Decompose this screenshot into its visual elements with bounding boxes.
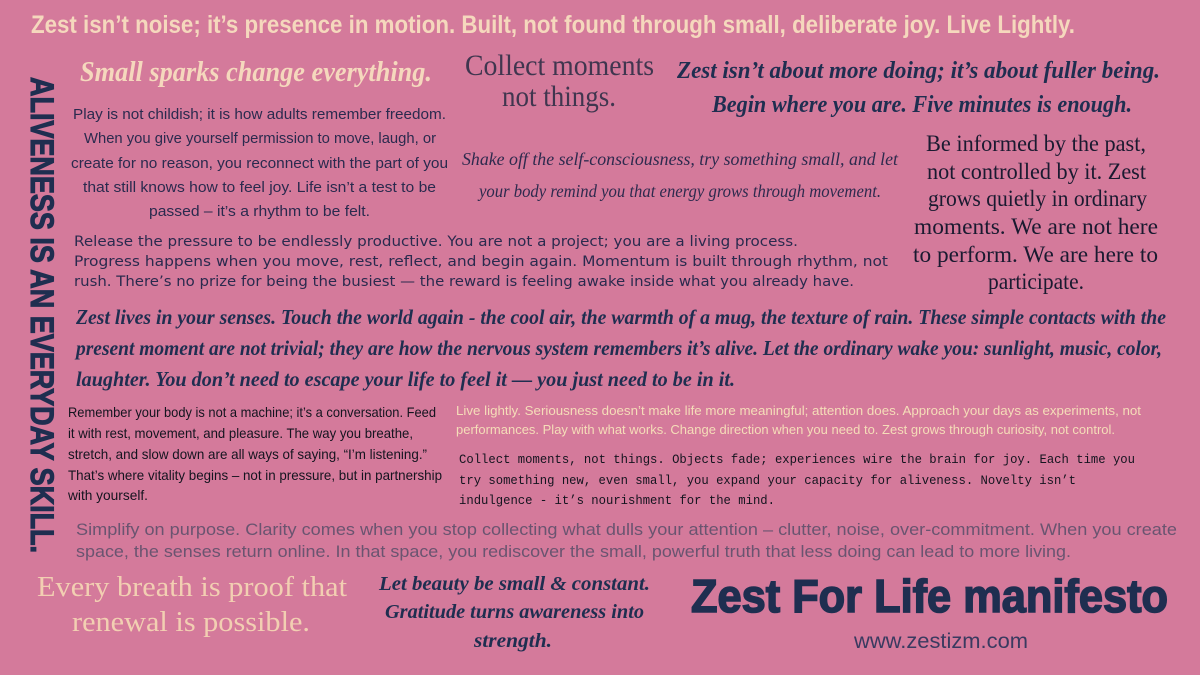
quote: zest isn't about more doing: Begin where you are. Five minutes is enough. bbox=[711, 92, 1132, 118]
script text: shake off the self-consciousness bbox=[462, 149, 899, 201]
quote: let beauty be small: Gratitude turns awareness into bbox=[385, 601, 644, 623]
script text: shake off the self-consciousness: your body remind you that energy grows through movement. bbox=[477, 181, 881, 201]
quote: let beauty be small: strength. bbox=[473, 630, 552, 652]
text block: play is not childish: that still knows how to feel joy. Life isn’t a test to be bbox=[83, 179, 436, 196]
text block: be informed by the past: to perform. We are here to bbox=[913, 242, 1158, 267]
text block: be informed by the past: Be informed by the past, bbox=[926, 131, 1146, 156]
quote: every breath: renewal is possible. bbox=[72, 606, 310, 638]
text block: collect moments: Collect moments, not things. Objects fade; experiences wire the brain for joy. Each time you bbox=[459, 452, 1135, 467]
text block: simplify on purpose bbox=[76, 521, 1177, 561]
text block: collect moments: try something new, even small, you expand your capacity for aliveness. Novelty isn’t bbox=[459, 473, 1076, 488]
script text: shake off the self-consciousness: Shake off the self-consciousness, try something small, and let bbox=[462, 149, 899, 169]
text block: remember your body: That’s where vitality begins – not in pressure, but in partnership bbox=[68, 467, 442, 483]
headline: zest isn't noise: Zest isn’t noise; it’s presence in motion. Built, not found through small, deliberate joy. Live Lightly. bbox=[31, 11, 1075, 39]
text block: play is not childish: Play is not childish; it is how adults remember freedom. bbox=[73, 106, 446, 123]
quote: every breath: Every breath is proof that bbox=[37, 571, 347, 603]
text block: simplify on purpose: space, the senses return online. In that space, you rediscover the small, powerful truth that less doing can lead to more living. bbox=[76, 543, 1071, 561]
text block: be informed by the past: moments. We are not here bbox=[914, 214, 1158, 239]
text block: remember your body: stretch, and slow down are all ways of saying, “I’m listening.” bbox=[68, 446, 427, 462]
text block: be informed by the past: participate. bbox=[988, 269, 1084, 294]
vertical heading: aliveness is an everyday skill: ALIVENESS IS AN EVERYDAY SKILL. bbox=[24, 77, 60, 553]
quote: collect moments not things bbox=[465, 49, 654, 113]
text block: release the pressure: Progress happens when you move, rest, reflect, and begin again. Momentum is built through rhythm, not bbox=[74, 254, 888, 270]
quote: every breath bbox=[37, 571, 347, 638]
text block: remember your body: Remember your body is not a machine; it’s a conversation. Feed bbox=[68, 404, 436, 420]
website url: www.zestizm.com bbox=[853, 630, 1028, 653]
subheading: small sparks: Small sparks change everything. bbox=[80, 57, 432, 88]
text block: collect moments bbox=[459, 452, 1135, 508]
quote: zest isn't about more doing bbox=[676, 58, 1160, 118]
text block: release the pressure: Release the pressure to be endlessly productive. You are not a project; you are a living process. bbox=[74, 234, 798, 250]
text block: live lightly: Live lightly. Seriousness doesn’t make life more meaningful; attention does. Approach your days as experiments, not bbox=[456, 404, 1142, 418]
quote: zest isn't about more doing: Zest isn’t about more doing; it’s about fuller being. bbox=[676, 58, 1160, 84]
quote: let beauty be small bbox=[378, 573, 650, 652]
text block: play is not childish: passed – it’s a rhythm to be felt. bbox=[149, 203, 370, 220]
quote: let beauty be small: Let beauty be small & constant. bbox=[378, 573, 650, 595]
title: zest for life manifesto: Zest For Life manifesto bbox=[691, 570, 1168, 622]
text block: release the pressure: rush. There’s no prize for being the busiest — the reward is feeling awake inside what you already have. bbox=[74, 274, 854, 290]
text block: play is not childish: create for no reason, you reconnect with the part of you bbox=[71, 155, 448, 172]
text block: play is not childish: When you give yourself permission to move, laugh, or bbox=[84, 130, 436, 147]
text block: simplify on purpose: Simplify on purpose. Clarity comes when you stop collecting what dulls your attention – clutter, noise, over-commitment. When you create bbox=[76, 521, 1177, 539]
text block: live lightly: performances. Play with what works. Change direction when you need to. Zest grows through curiosity, not control. bbox=[456, 423, 1115, 437]
text block: zest lives in your senses bbox=[74, 305, 1166, 391]
text block: be informed by the past: grows quietly in ordinary bbox=[928, 186, 1147, 211]
text block: live lightly bbox=[456, 404, 1142, 437]
quote: collect moments not things: Collect moments bbox=[465, 49, 654, 82]
text block: zest lives in your senses: laughter. You don’t need to escape your life to feel it — you just need to be in it. bbox=[76, 367, 735, 391]
text block: remember your body bbox=[67, 404, 442, 503]
text block: release the pressure bbox=[74, 234, 888, 290]
text block: remember your body: with yourself. bbox=[67, 487, 148, 503]
text block: be informed by the past bbox=[913, 131, 1158, 294]
text block: remember your body: it with rest, movement, and pleasure. The way you breathe, bbox=[68, 425, 413, 441]
text block: play is not childish bbox=[71, 106, 448, 220]
text block: collect moments: indulgence - it’s nourishment for the mind. bbox=[459, 493, 775, 508]
text block: be informed by the past: not controlled by it. Zest bbox=[927, 159, 1147, 184]
quote: collect moments not things: not things. bbox=[502, 80, 616, 113]
